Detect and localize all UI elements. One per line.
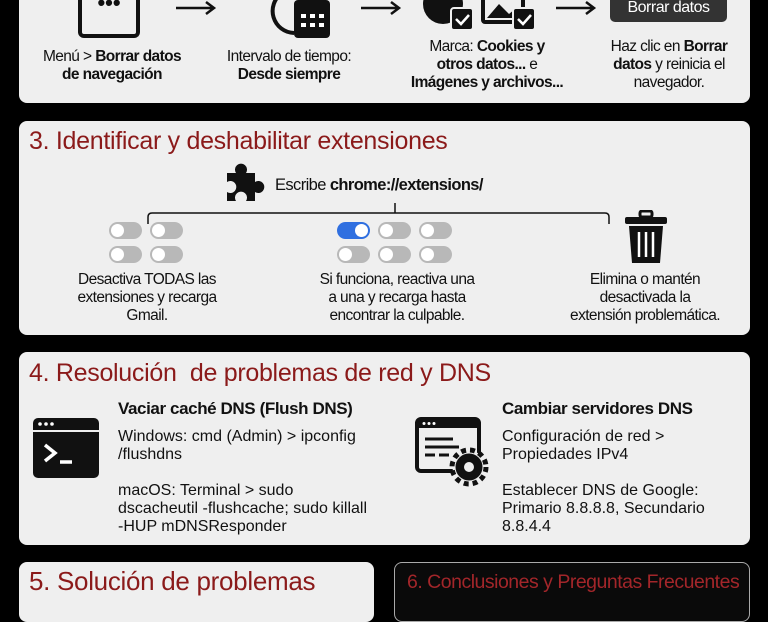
text: flush dns: Windows: cmd (Admin) > ipconfig /flushdns: [118, 428, 356, 463]
text: cambiar dns: Configuración de red > Propiedades IPv4: [502, 428, 664, 463]
text step 1: [43, 48, 181, 83]
button: borrar datos: [610, 0, 727, 22]
panel: red y DNS: [19, 352, 750, 545]
text col 3: Elimina o mantén: [590, 271, 700, 288]
heading: 5. Solución de problemas: [29, 566, 315, 596]
text step 3: Marca: Cookies y: [429, 38, 545, 55]
icon: menu: [78, 0, 140, 38]
icon: settings window: [415, 417, 488, 486]
text step 2: [227, 48, 351, 83]
text col 2: Si funciona, reactiva una: [320, 271, 474, 288]
text step 2: Desde siempre: [238, 66, 340, 83]
panel: borrar datos steps: [19, 0, 750, 103]
icon: clock calendar: [270, 0, 330, 38]
text col 2: encontrar la culpable.: [329, 307, 464, 324]
arrow: [556, 1, 596, 15]
text step 4: Haz clic en Borrar: [611, 38, 727, 55]
text col 3: [570, 271, 720, 324]
text: cambiar dns: [502, 399, 705, 535]
text col 2: [320, 271, 475, 324]
panel: conclusiones: [394, 562, 750, 622]
text: flush dns: [118, 399, 367, 535]
panel: solucion de problemas: [19, 562, 374, 622]
text step 4: navegador.: [634, 74, 704, 91]
heading: 4. Resolución de problemas de red y DNS: [29, 359, 491, 387]
arrow: [361, 1, 401, 15]
text col 3: extensión problemática.: [570, 307, 720, 324]
bracket: [147, 203, 610, 224]
text step 4: datos y reinicia el: [613, 56, 725, 73]
icon: trash: [625, 210, 667, 263]
panel: extensiones: [19, 121, 750, 335]
toggles group 2: [337, 222, 452, 263]
text col 1: Desactiva TODAS las: [78, 271, 216, 288]
icon: terminal: [33, 418, 99, 478]
text step 2: Intervalo de tiempo:: [227, 48, 351, 65]
text step 3: [411, 38, 563, 91]
text col 1: [77, 271, 218, 324]
text: cambiar dns: Cambiar servidores DNS: [502, 399, 693, 418]
text: flush dns: Vaciar caché DNS (Flush DNS): [118, 399, 352, 418]
text col 1: extensiones y recarga: [77, 289, 217, 306]
heading: 6. Conclusiones y Preguntas Frecuentes: [407, 571, 739, 593]
text col 3: desactivada la: [600, 289, 690, 306]
text col 2: a una y recarga hasta: [328, 289, 466, 306]
text: cambiar dns: Establecer DNS de Google: Primario 8.8.8.8, Secundario 8.8.4.4: [502, 482, 705, 535]
toggles group 1: [109, 222, 183, 263]
text step 3: Imágenes y archivos...: [411, 74, 563, 91]
text step 4: [611, 38, 728, 91]
icon: puzzle: [227, 164, 264, 201]
text step 1: de navegación: [62, 66, 162, 83]
text: flush dns: macOS: Terminal > sudo dscacheutil -flushcache; sudo killall -HUP mDNSResponder: [118, 482, 367, 535]
text step 3: otros datos... e: [437, 56, 537, 73]
arrow: [176, 1, 216, 15]
heading: 3. Identificar y deshabilitar extensiones: [29, 127, 448, 155]
text step 1: Menú > Borrar datos: [43, 48, 181, 65]
icon: cookies and images: [423, 0, 534, 29]
text col 1: Gmail.: [126, 307, 168, 324]
text: chrome extensions: Escribe chrome://extensions/: [275, 176, 483, 194]
